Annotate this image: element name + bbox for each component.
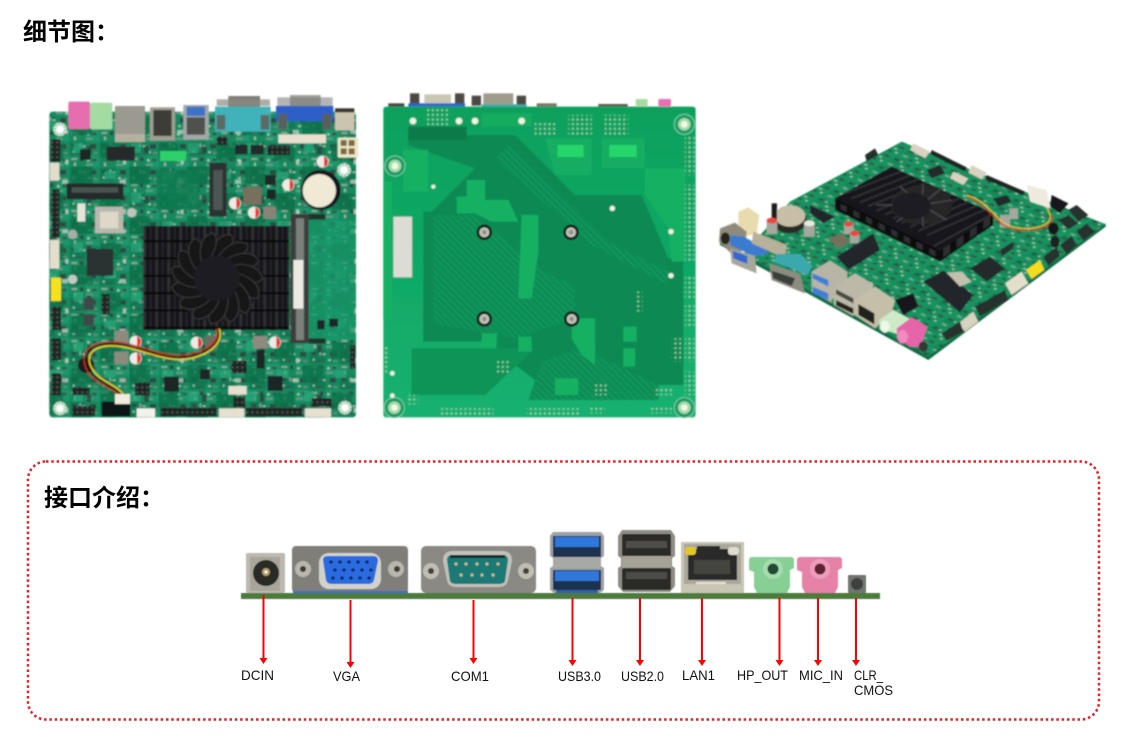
PCB base bbox=[49, 112, 356, 417]
lighter copper pours bbox=[383, 113, 685, 395]
label: CLR_CMOS: CLR_ bbox=[854, 667, 883, 683]
arrow: VGA bbox=[346, 600, 354, 668]
rear connectors bbox=[719, 207, 928, 352]
panel heading: 接口介绍： bbox=[44, 485, 164, 512]
bright pads bbox=[558, 145, 637, 157]
arrow: MIC_IN bbox=[814, 598, 822, 666]
dotted panel border bbox=[28, 462, 1099, 720]
fan cable bbox=[84, 329, 220, 396]
PCB base bbox=[383, 107, 696, 417]
label: USB2.0: USB2.0 bbox=[621, 668, 664, 684]
fan bbox=[877, 185, 952, 227]
mounting holes bbox=[384, 114, 694, 418]
fan bbox=[171, 232, 263, 324]
label: LAN1: LAN1 bbox=[682, 667, 715, 683]
connector: DC jack bbox=[246, 553, 285, 593]
label: HP_OUT: HP_OUT bbox=[737, 667, 788, 683]
white solder points bbox=[390, 118, 674, 398]
top connector silhouettes bbox=[388, 93, 671, 107]
label: DCIN: DCIN bbox=[241, 667, 274, 683]
battery and capacitors bbox=[767, 203, 1018, 249]
photo: board perspective view bbox=[719, 142, 1106, 360]
arrow: CLR_CMOS bbox=[852, 598, 860, 666]
label: USB3.0: USB3.0 bbox=[558, 668, 601, 684]
mini-PCIe slots bbox=[810, 205, 973, 313]
panel: interface introduction bbox=[28, 462, 1099, 720]
headers and side connectors bbox=[50, 137, 355, 417]
fan cable bbox=[967, 189, 1052, 231]
connector: USB 3.0 bbox=[550, 532, 604, 593]
label: COM1: COM1 bbox=[451, 668, 489, 684]
memory slot bbox=[291, 214, 325, 344]
slots and chips bbox=[67, 145, 338, 392]
dark routed regions bbox=[408, 127, 683, 400]
mounting holes bbox=[53, 123, 352, 415]
label: CLR_CMOS: CMOS bbox=[854, 682, 893, 698]
connector: microphone jack bbox=[797, 557, 842, 593]
title: detail images: 细节图： bbox=[23, 19, 119, 46]
arrow: LAN1 bbox=[698, 598, 706, 666]
serial number sticker bbox=[393, 217, 412, 277]
photo: board top view bbox=[49, 95, 358, 417]
right memory area bbox=[308, 220, 355, 340]
photo: board bottom view bbox=[383, 93, 696, 418]
PCB edge strip bbox=[241, 593, 880, 599]
connector: headphone jack bbox=[749, 557, 794, 593]
PCB top bbox=[743, 142, 1105, 357]
capacitors bbox=[130, 156, 329, 364]
heatsink bbox=[835, 167, 993, 262]
arrow: USB3.0 bbox=[568, 598, 576, 666]
rear I/O connector strip bbox=[241, 530, 880, 599]
heatsink bbox=[143, 226, 289, 330]
arrow: HP_OUT bbox=[776, 598, 784, 666]
rear connectors bbox=[68, 95, 358, 158]
coin battery bbox=[301, 170, 341, 210]
label: MIC_IN: MIC_IN bbox=[799, 667, 843, 683]
PCB edge bbox=[720, 223, 1106, 360]
arrow: DCIN bbox=[260, 595, 268, 664]
connector: CMOS clear button bbox=[848, 575, 866, 593]
label: VGA: VGA bbox=[333, 668, 361, 684]
connector: VGA bbox=[292, 546, 408, 593]
mounting screws bbox=[477, 225, 579, 327]
connector: LAN bbox=[681, 542, 744, 593]
arrow: USB2.0 bbox=[636, 598, 644, 666]
via fields bbox=[385, 107, 694, 415]
label: CLR_CMOS bbox=[854, 667, 893, 698]
arrow: COM1 bbox=[470, 600, 478, 664]
connector: USB 2.0 bbox=[618, 530, 675, 592]
headers and connectors bbox=[865, 143, 1095, 341]
connector: serial port bbox=[421, 546, 536, 593]
